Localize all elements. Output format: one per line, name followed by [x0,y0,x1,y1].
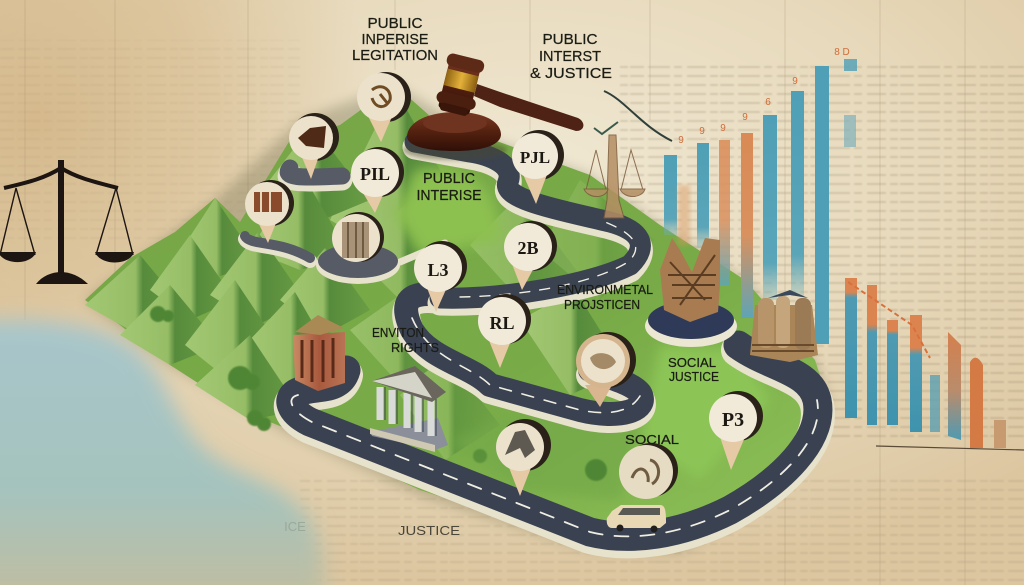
label: environ rights: ENVITON [372,325,424,340]
bright valley patches [395,168,500,255]
chart baseline [876,446,1024,450]
label: environmental protection: ENVIRONMETAL [557,282,653,297]
pin: 28: 2B [517,238,539,258]
heading: public interest and justice: INTERST [539,48,601,65]
gavel block shadow [403,140,507,160]
icon: small van [607,505,666,532]
pin: P3 [709,391,763,470]
label: environmental protection: PROJSTICEN [564,297,640,312]
heading: public interest and justice [530,31,612,82]
bar value markers: 9 [699,126,705,137]
heading: public interest litigation [352,15,438,64]
building: carved tan crown [660,238,720,322]
panel: winding road network [245,142,818,541]
label: social justice: SOCIAL [668,355,716,370]
upper road [415,142,640,303]
label: public interest on hill: INTERISE [416,187,482,204]
building: classical courthouse [370,366,448,452]
building: stone towers [750,290,818,362]
gavel block [407,112,501,151]
bar value markers: 9 [720,123,726,134]
heading: public interest litigation: INPERISE [362,31,428,48]
pin: L3: L3 [427,260,449,280]
pin: PIL centre: PIL [360,164,390,184]
label: public interest on hill: PUBLIC [423,170,475,187]
icon: tall scales on hillside [584,135,645,218]
bar value markers: 9 [678,135,684,146]
icon: gavel on sound block [403,52,583,160]
middle road [406,294,642,419]
pin: globe medallion [576,332,636,407]
pin: PIL centre [351,147,404,213]
pin: shells [619,443,678,499]
pin: P3: P3 [722,409,744,431]
small road pads [245,168,737,347]
label: justice on shoreline: JUSTICE [398,523,460,538]
heading: public interest and justice: PUBLIC [542,31,598,48]
label: environmental protection [557,282,653,312]
bar value markers: 9 [742,112,748,123]
label: environ rights [372,325,439,355]
bar value markers: 6 [765,97,771,108]
building: red archive [293,315,345,391]
label: social lower: SOCIAL [625,432,679,447]
bar chart: falling bars [845,278,1024,450]
bar value markers: 8 D [834,47,850,58]
pin: PIL upper right [512,130,564,204]
pin: figures [496,419,551,496]
heading: public interest litigation: LEGITATION [352,47,438,64]
lower road [291,345,818,541]
label: environ rights: RIGHTS [391,340,439,355]
faint sea label: ICE [284,519,306,534]
bar value markers [678,47,850,146]
pin: RL [478,294,531,368]
terrain base [85,85,828,548]
gavel head [434,52,486,118]
pin: 28 [504,221,557,290]
pin: books [245,180,294,243]
heading: public interest and justice: & JUSTICE [530,65,612,82]
label: social justice [668,355,719,384]
panel: green mountain terrain [85,85,830,552]
terrain shadow [85,85,830,552]
mountain peaks [85,88,655,460]
pin: buildings medallion [332,212,384,262]
map pins [245,72,763,499]
trees and shrubs [150,306,607,481]
pin: top emblem [357,72,411,142]
label: social justice: JUSTICE [669,369,719,384]
tick mark [594,122,618,134]
label: public interest on hill [416,170,482,204]
pin: RL: RL [489,313,515,333]
pin: PIL upper right: PJL [520,148,550,167]
bar chart: rising bars [664,47,857,344]
falling trend line [848,282,930,358]
gavel handle [474,84,583,131]
pin: dark icon [289,113,339,179]
pin: L3 [414,241,467,312]
icon: scales of justice silhouette [0,160,134,284]
bar value markers: 9 [792,76,798,87]
heading: public interest litigation: PUBLIC [368,15,423,32]
chart line: dark trend curve [604,91,672,141]
sea area [0,320,325,585]
